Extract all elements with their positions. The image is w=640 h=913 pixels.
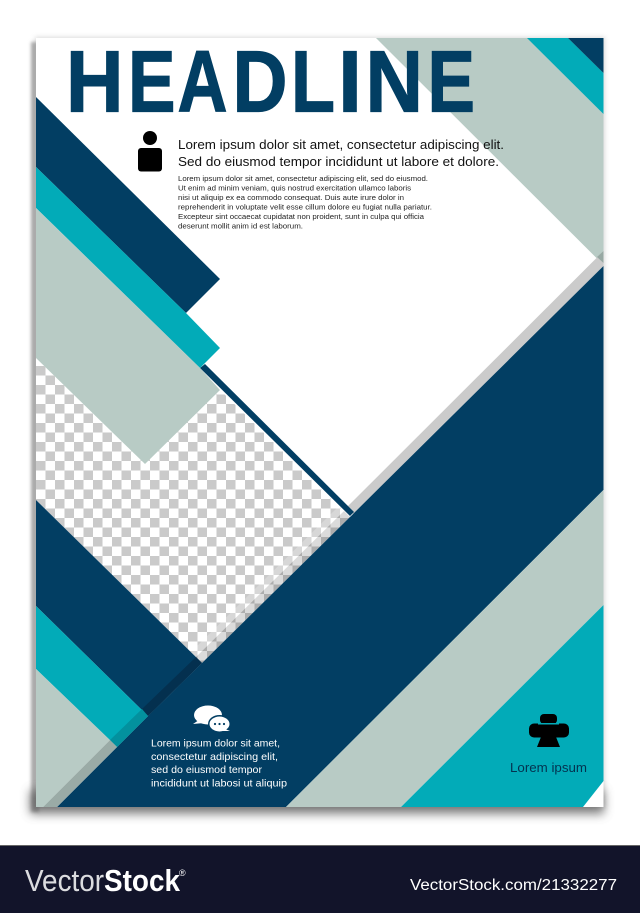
logo: VectorStock — [25, 863, 181, 898]
caption text: sed do eiusmod tempor — [151, 764, 263, 776]
checkerboard inner shadow — [196, 511, 350, 663]
title: I — [338, 32, 362, 130]
body text: nisi ut aliquip ex ea commodo consequat. Duis aute irure dolor in — [178, 193, 404, 202]
panel: stripe overlap — [597, 251, 604, 263]
panel: dark navy fold — [142, 657, 202, 716]
title — [66, 32, 475, 130]
caption text: incididunt ut labosi ut aliquip — [151, 778, 287, 790]
subheading: Lorem ipsum dolor sit amet, consectetur adipiscing elit. — [178, 137, 504, 152]
title: E — [128, 32, 176, 130]
subheading: Sed do eiusmod tempor incididunt ut labore et dolore. — [178, 154, 499, 169]
panel: top right sage triangle — [376, 38, 604, 265]
subheading — [178, 137, 504, 169]
panel: upper left navy band — [36, 97, 220, 313]
panel: gray diagonal stripe — [347, 251, 604, 515]
panel: dark teal fold — [110, 709, 148, 747]
printer label: Lorem ipsum — [510, 760, 587, 775]
panel: lower left teal band — [36, 606, 148, 747]
page shadow — [30, 37, 605, 814]
caption text: consectetur adipiscing elit, — [151, 751, 278, 763]
panel: lower left sage triangle — [36, 669, 110, 807]
panel: top right teal band — [527, 38, 604, 114]
title: L — [291, 32, 335, 130]
registered mark: ® — [179, 868, 186, 878]
panel: thin navy diagonal line — [200, 364, 354, 516]
body text: Excepteur sint occaecat cupidatat non proident, sunt in culpa qui officia — [178, 212, 425, 221]
icon: printer — [529, 714, 569, 747]
icon: chat bubbles — [193, 706, 231, 733]
body text: Ut enim ad minim veniam, quis nostrud exercitation ullamco laboris — [178, 184, 411, 192]
title: N — [366, 32, 423, 130]
panel: bottom right sage band — [286, 490, 604, 807]
icon: person — [138, 131, 162, 172]
panel: upper left sage band — [36, 208, 220, 464]
flyer page — [36, 38, 604, 807]
caption text — [151, 738, 287, 790]
body text: deserunt mollit anim id est laborum. — [178, 222, 303, 230]
title: E — [428, 32, 475, 130]
title: D — [232, 32, 288, 130]
checkerboard inner highlight — [191, 506, 344, 657]
image id: VectorStock.com/21332277 — [410, 877, 617, 894]
panel: top right navy corner — [568, 38, 604, 73]
footer bar — [0, 845, 640, 913]
panel: lower left navy band — [36, 500, 202, 716]
title: A — [178, 32, 228, 130]
panel: bottom right teal band — [401, 605, 604, 807]
body text — [178, 174, 432, 230]
body text: reprehenderit in voluptate velit esse cillum dolore eu fugiat nulla pariatur. — [178, 202, 432, 212]
placeholder checkerboard — [36, 358, 350, 663]
caption text: Lorem ipsum dolor sit amet, — [151, 738, 280, 750]
panel: gray fold — [43, 740, 117, 807]
panel: big navy band — [57, 266, 604, 807]
body text: Lorem ipsum dolor sit amet, consectetur adipiscing elit, sed do eiusmod. — [178, 174, 428, 183]
panel: upper left teal band — [36, 167, 220, 368]
title: H — [66, 32, 124, 130]
